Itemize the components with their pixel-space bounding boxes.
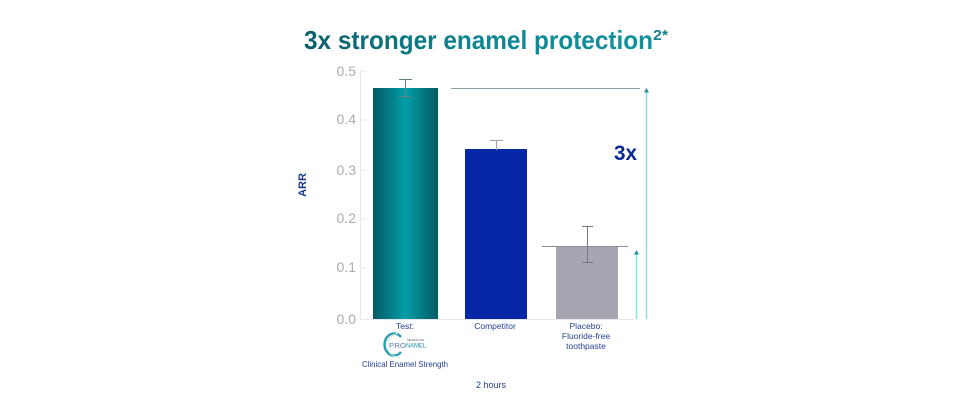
label: competitor: Competitor: [474, 321, 516, 331]
y axis labels: 0.0: [337, 311, 356, 327]
y axis labels: 0.2: [337, 210, 356, 226]
label: placebo: Placebo:: [569, 321, 603, 331]
icon: Pronamel logo: SENSODYNE: [407, 339, 424, 342]
reference line: placebo level: [542, 246, 628, 248]
x labels: [362, 321, 610, 390]
bar: placebo: [556, 226, 618, 319]
y axis labels: [337, 63, 356, 327]
label: time point: 2 hours: [476, 380, 507, 390]
arrow: 3x span: [644, 88, 649, 319]
icon: Pronamel logo: [385, 333, 427, 357]
label: placebo: Fluoride-free: [562, 331, 610, 341]
y axis labels: 0.1: [337, 259, 356, 275]
title: 3x stronger enamel protection: [304, 25, 653, 55]
y axis labels: 0.4: [337, 111, 356, 127]
callout: 3x: 3x: [614, 142, 637, 165]
y axis lines: [360, 71, 634, 320]
bar: competitor: [465, 140, 527, 319]
y axis title: ARR: [297, 173, 309, 197]
y axis labels: 0.3: [337, 162, 356, 178]
label: product name: Clinical Enamel Strength: [362, 359, 448, 369]
title superscript: 2*: [653, 27, 668, 44]
icon: Pronamel logo: PRO: [389, 343, 407, 350]
label: test: Test:: [396, 321, 414, 331]
y axis labels: 0.5: [337, 63, 356, 79]
reference line: test level: [451, 88, 640, 90]
arrow: placebo span: [634, 250, 639, 319]
label: placebo: toothpaste: [566, 341, 606, 351]
icon: Pronamel logo: NAMEL: [406, 344, 427, 350]
bar: test: [373, 79, 438, 319]
